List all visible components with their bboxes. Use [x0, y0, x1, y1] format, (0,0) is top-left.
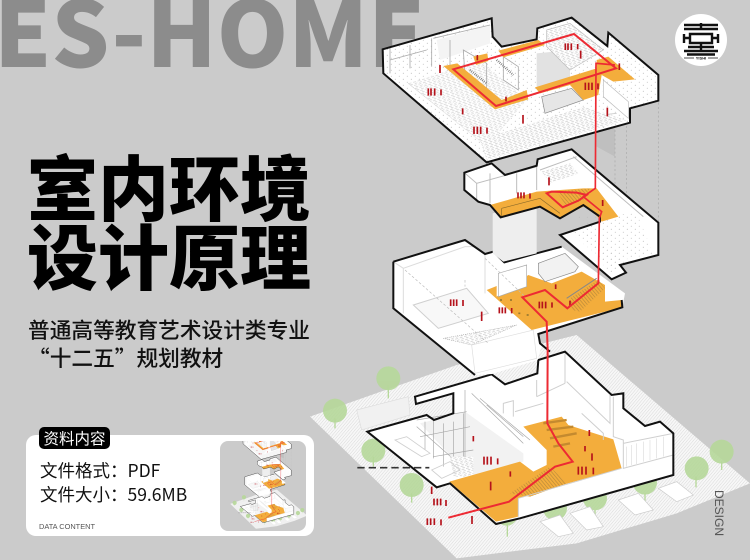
subtitle line 1: 普通高等教育艺术设计类专业 [28, 314, 310, 345]
subtitle line 2: “十二五”规划教材 [28, 342, 223, 373]
thumbnail of diagram [220, 441, 306, 531]
file format: 文件格式：PDF [40, 458, 160, 483]
title line 2: 设计原理 [27, 203, 311, 305]
title line 1: 室内环境 [27, 134, 311, 236]
vertical label: DESIGN: DESIGN [712, 490, 726, 536]
card tag: 资料内容 [43, 427, 106, 449]
info card [26, 435, 314, 536]
data content caption: DATA CONTENT [39, 522, 95, 531]
file size: 文件大小：59.6MB [40, 482, 187, 507]
logo badge [675, 14, 727, 66]
logo badge: YISHI [696, 56, 706, 61]
